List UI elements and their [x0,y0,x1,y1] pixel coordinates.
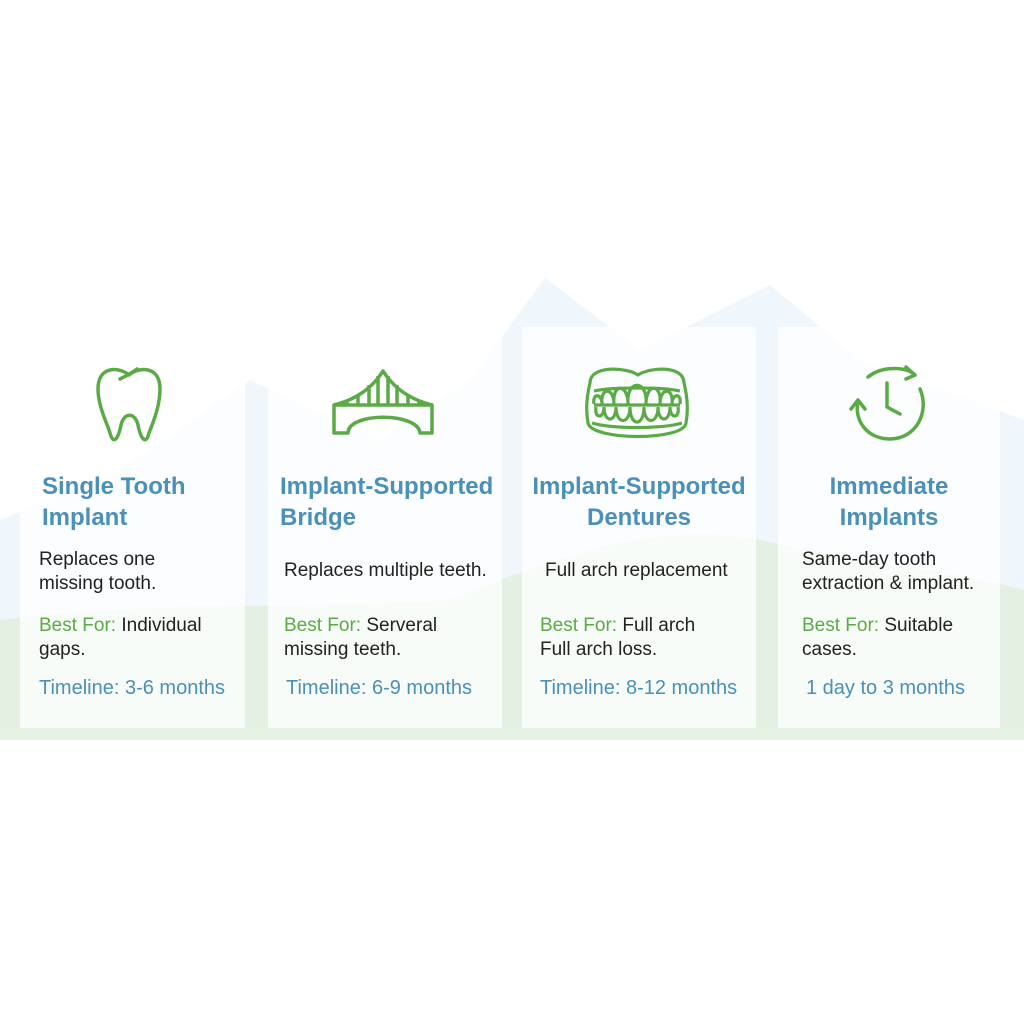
best for: Full arch loss. [540,639,657,660]
heading [830,473,948,531]
heading: Implant-Supported [280,473,493,500]
description [802,549,974,594]
best for [540,615,695,660]
description: Replaces one [39,549,155,570]
description: Full arch replacement [545,560,728,581]
card: immediate implants [778,327,1000,728]
best for: gaps. [39,639,85,660]
timeline: Timeline: 3-6 months [39,677,225,699]
card: implant-supported dentures [522,327,756,728]
heading: Single Tooth [42,473,186,500]
description: Replaces multiple teeth. [284,560,487,581]
heading: Implant [42,504,127,531]
best for: Best For: Suitable [802,615,953,636]
description: extraction & implant. [802,573,974,594]
icon: tooth [96,367,162,442]
card: implant-supported bridge [268,327,502,728]
icon: bridge [332,369,434,435]
icon: dentures [585,368,689,438]
icon: clock refresh [849,365,925,441]
heading [280,473,493,531]
best for [802,615,953,660]
best for: Best For: Serveral [284,615,437,636]
heading: Immediate [830,473,948,500]
heading: Implant-Supported [532,473,746,500]
card: single tooth implant [20,327,245,728]
best for [39,615,202,660]
best for: cases. [802,639,857,660]
best for: Best For: Individual [39,615,202,636]
heading [42,473,186,531]
timeline: Timeline: 8-12 months [540,677,737,699]
heading: Bridge [280,504,356,531]
heading: Implants [840,504,938,531]
best for: missing teeth. [284,639,401,660]
heading [532,473,746,531]
timeline: 1 day to 3 months [806,677,965,699]
description: Same-day tooth [802,549,936,570]
timeline: Timeline: 6-9 months [286,677,472,699]
description: missing tooth. [39,573,156,594]
description [39,549,156,594]
heading: Dentures [587,504,691,531]
best for [284,615,437,660]
best for: Best For: Full arch [540,615,695,636]
